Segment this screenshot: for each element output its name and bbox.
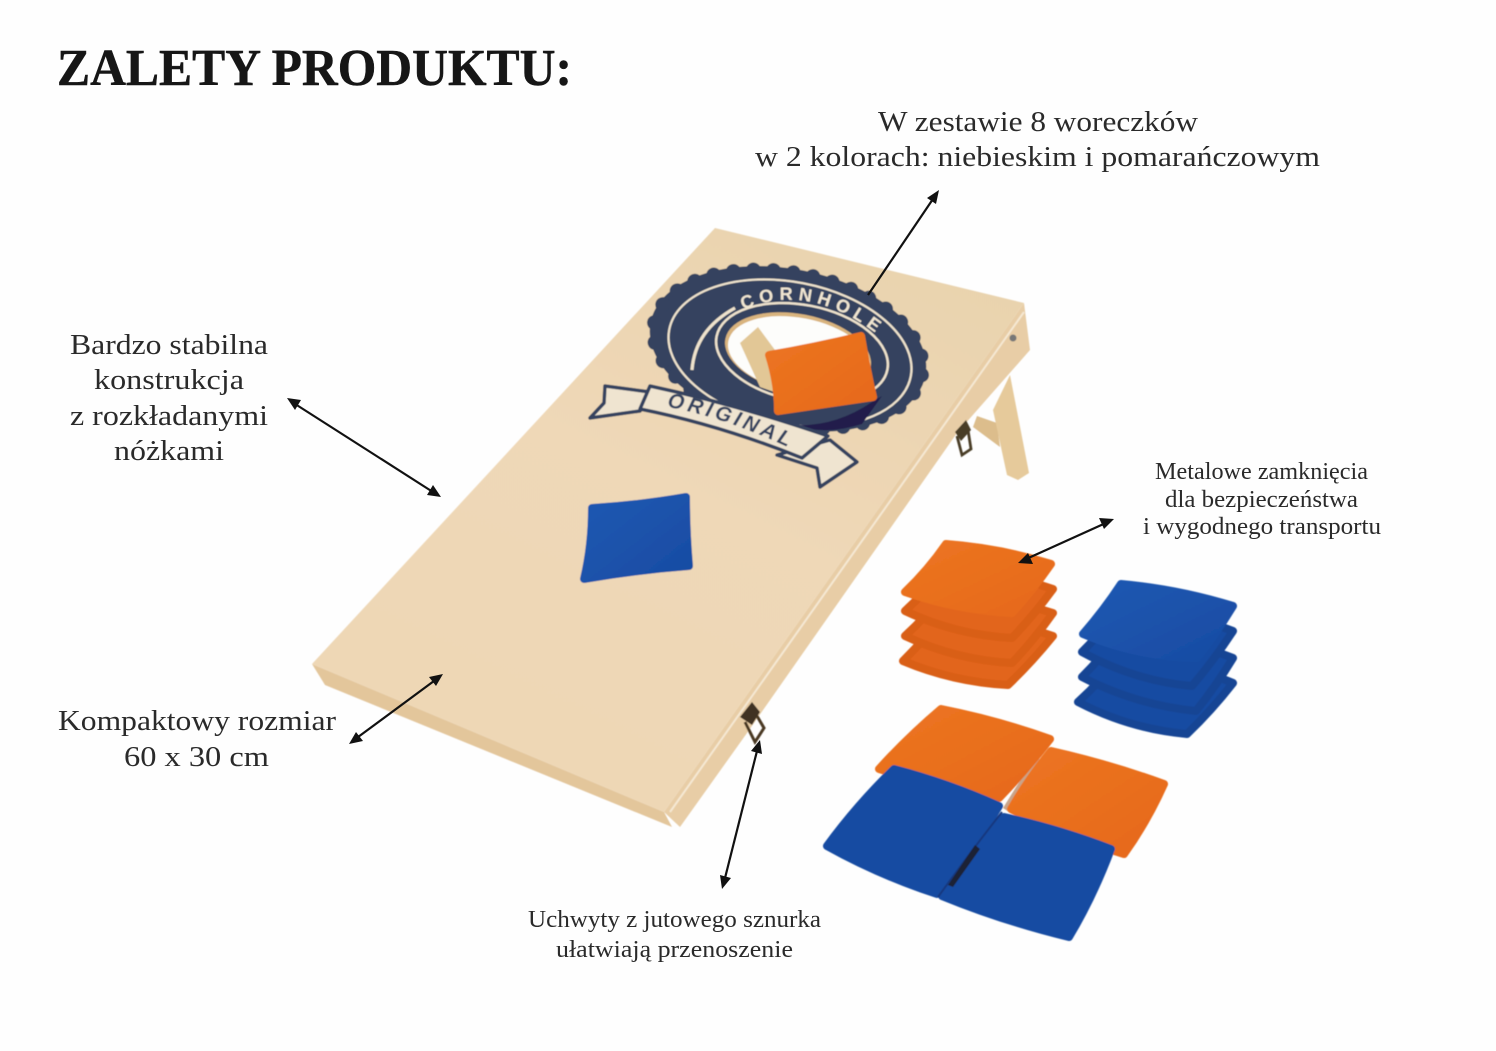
blue bag stack xyxy=(1078,584,1233,734)
hole rim xyxy=(718,301,878,405)
double arrow to board xyxy=(349,674,443,744)
callout: compact size xyxy=(58,674,443,773)
callout text: W zestawie 8 woreczków xyxy=(878,106,1198,138)
callout text xyxy=(755,106,1320,173)
screw xyxy=(1010,334,1016,342)
logo badge xyxy=(588,262,930,490)
banner main xyxy=(640,386,828,458)
callout: jute handles xyxy=(528,740,821,963)
callout text: ułatwiają przenoszenie xyxy=(556,937,793,963)
double arrow to bags xyxy=(1018,518,1114,564)
rear leg xyxy=(973,375,1029,480)
orange bag stack xyxy=(903,544,1053,685)
callout text: Kompaktowy rozmiar xyxy=(58,705,336,737)
callout: bags in set xyxy=(755,106,1320,295)
CORNHOLE lettering: CORNHOLE xyxy=(740,286,882,333)
blue flat bag left xyxy=(827,769,999,894)
metal clasp upper xyxy=(955,420,971,455)
double arrow to board xyxy=(287,398,441,497)
callout text xyxy=(1143,459,1381,540)
board top face xyxy=(312,228,1024,812)
callout text: z rozkładanymi xyxy=(70,400,268,432)
hole xyxy=(721,305,877,405)
banner right tail xyxy=(777,440,857,487)
callout text: 60 x 30 cm xyxy=(124,741,269,773)
badge scalloped disc xyxy=(635,244,941,454)
blue flat bag right xyxy=(942,817,1111,937)
callout text: dla bezpieczeństwa xyxy=(1165,487,1358,513)
badge outer ring xyxy=(656,260,924,446)
flat bags group xyxy=(827,709,1164,937)
badge lower shadow xyxy=(795,396,882,430)
orange flat bag rear xyxy=(879,709,1050,798)
callout text: Bardzo stabilna xyxy=(70,329,268,361)
banner left tail xyxy=(590,386,650,418)
metal clasp lower xyxy=(740,702,764,742)
callout text xyxy=(58,705,336,773)
dark gap between blue bags xyxy=(948,845,980,887)
cornhole board xyxy=(312,228,1030,828)
board edge highlight xyxy=(670,312,1024,812)
ORIGINAL lettering: ORIGINAL xyxy=(668,393,788,447)
callout text: Uchwyty z jutowego sznurka xyxy=(528,907,821,933)
callout text: w 2 kolorach: niebieskim i pomarańczowym xyxy=(755,141,1320,173)
orange flat bag right xyxy=(1011,751,1164,854)
callout: stable construction xyxy=(70,329,441,497)
double arrow to handle xyxy=(720,740,762,889)
title: ZALETY PRODUKTU: xyxy=(57,40,572,97)
orange bag in the hole xyxy=(769,336,873,411)
gap showing wood xyxy=(1003,755,1044,814)
board front face xyxy=(312,664,672,827)
badge inner ring xyxy=(707,289,897,417)
callout: metal clasps xyxy=(1018,459,1381,564)
board side face xyxy=(664,303,1030,827)
callout text: Metalowe zamknięcia xyxy=(1155,459,1368,485)
callout text xyxy=(70,329,268,467)
callout text xyxy=(528,907,821,963)
blue bag on the board xyxy=(584,497,689,579)
callout text: konstrukcja xyxy=(94,364,244,396)
badge inner arc xyxy=(692,308,735,370)
callout text: nóżkami xyxy=(114,435,224,467)
arrow to bags xyxy=(868,190,939,295)
seam between blue bags xyxy=(938,812,1002,897)
callout text: i wygodnego transportu xyxy=(1143,514,1381,540)
leg seen through hole xyxy=(740,327,777,393)
